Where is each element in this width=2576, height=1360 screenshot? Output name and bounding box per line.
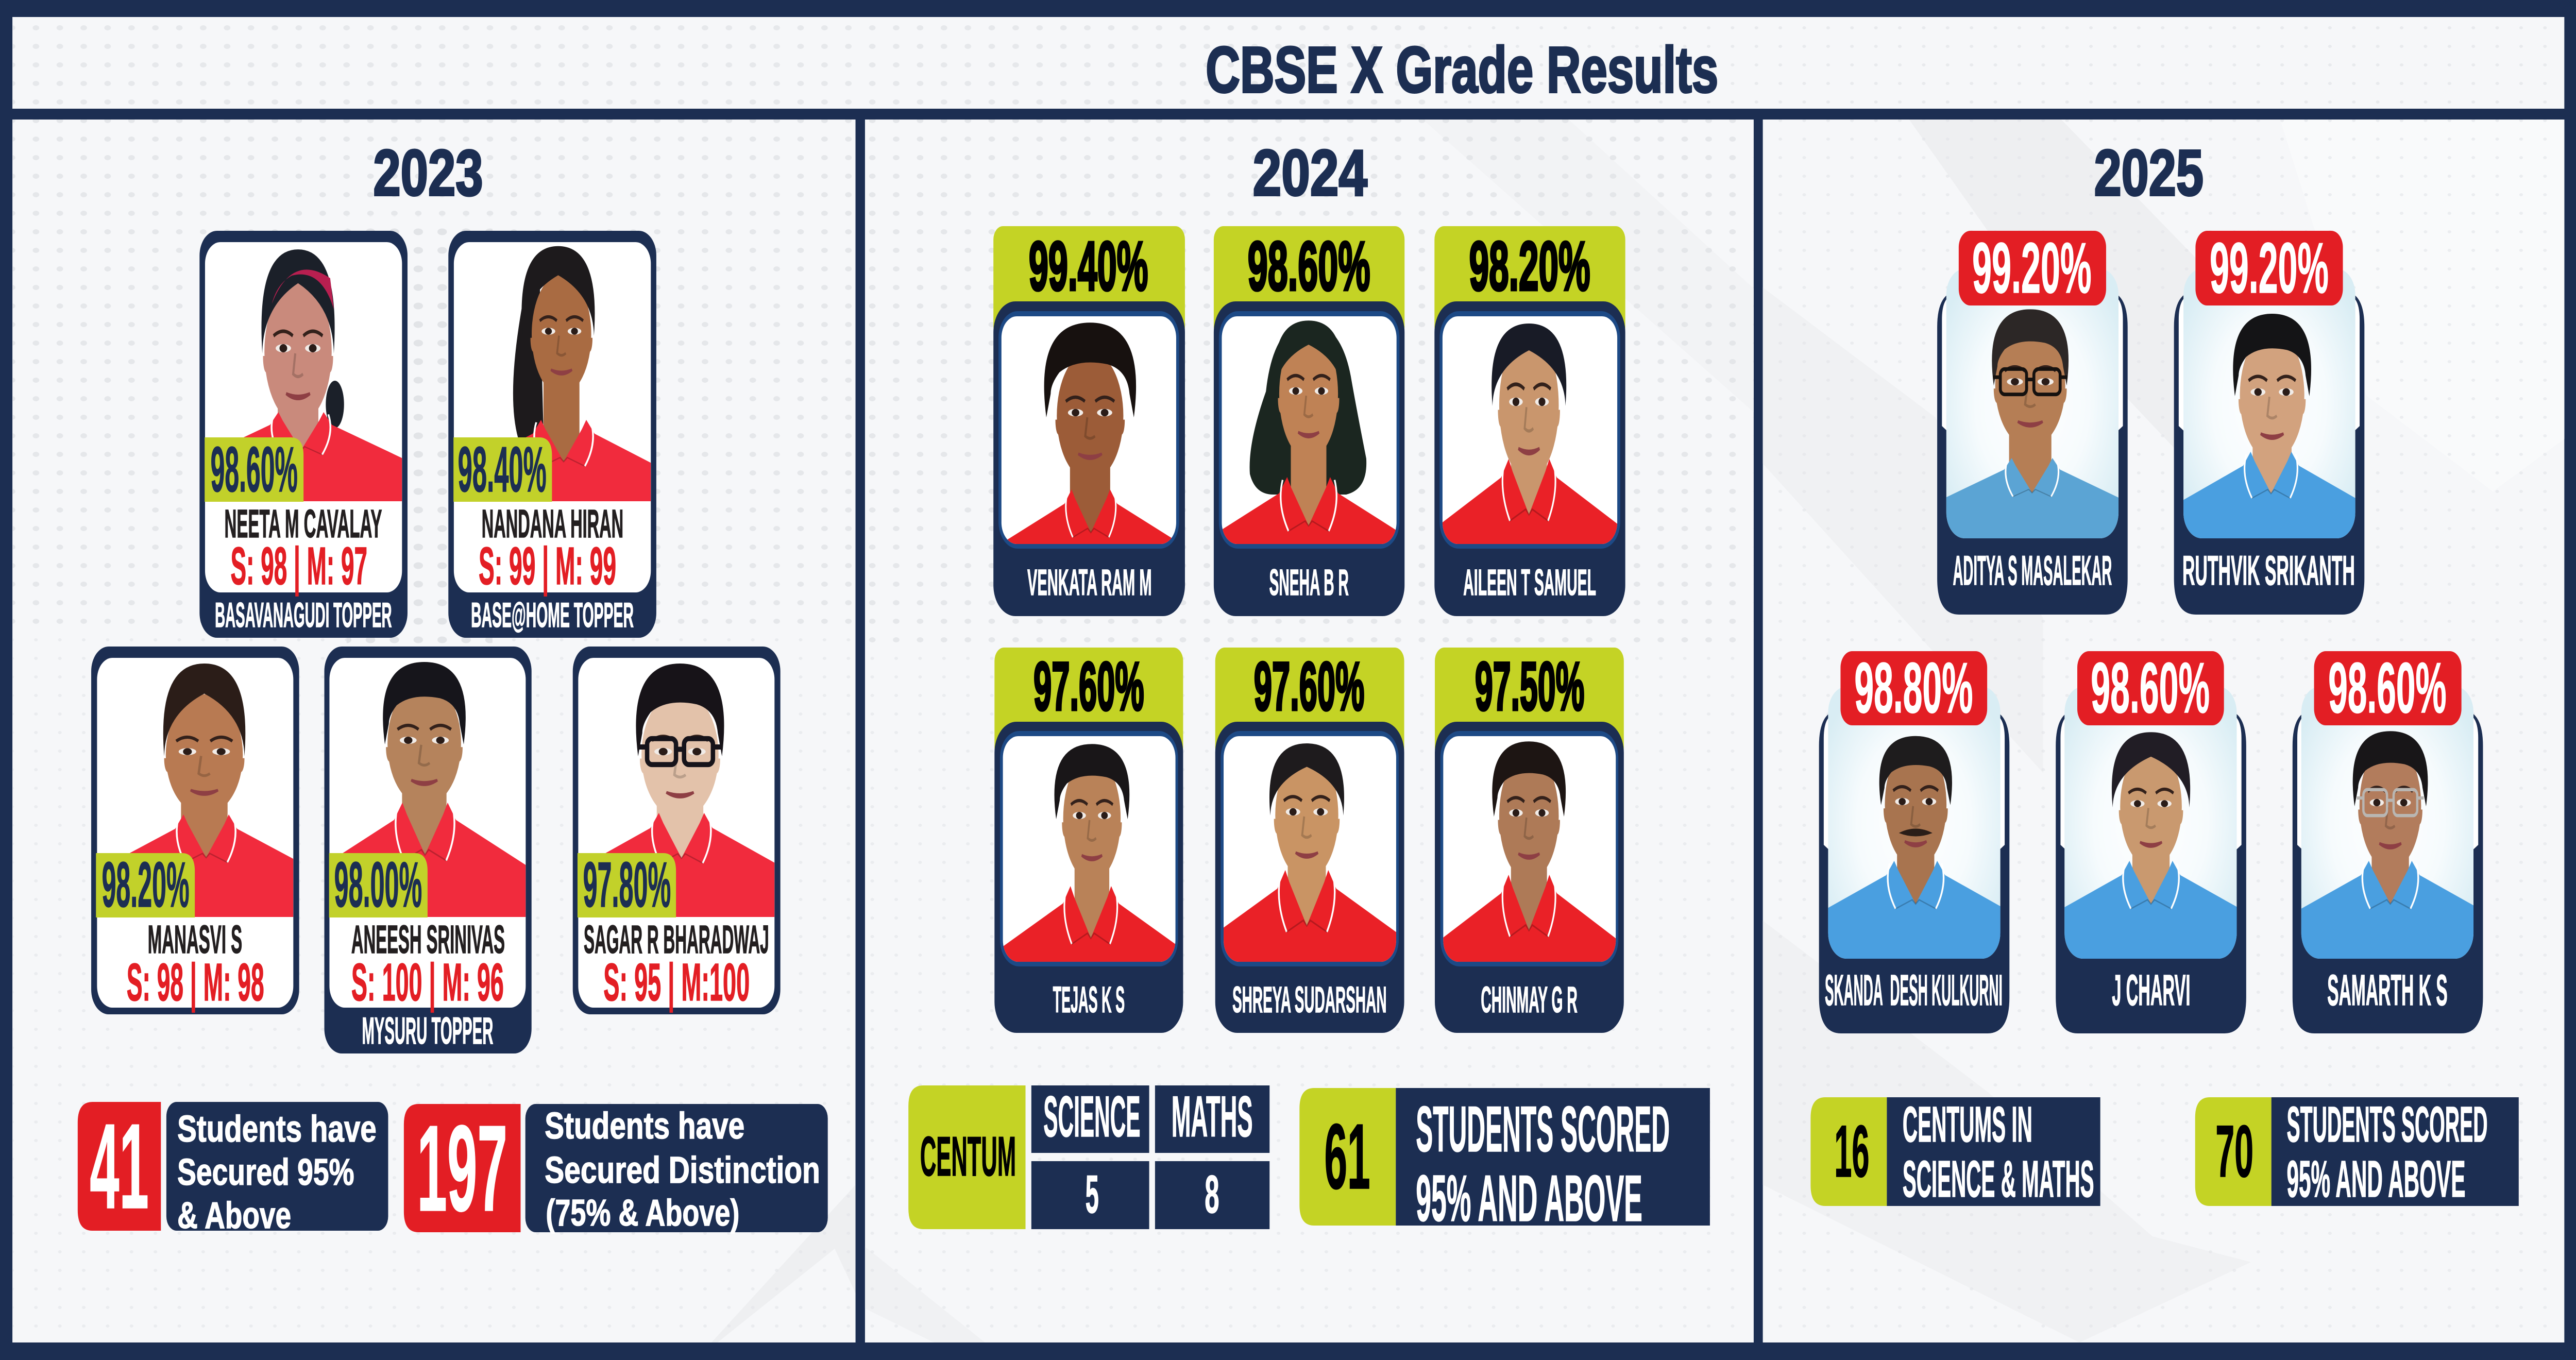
photo: Tejas xyxy=(986,744,1196,1052)
percentage badge: 98.80% xyxy=(1854,648,1973,728)
name: MANASVI S xyxy=(148,918,242,962)
percentage: 98.20% xyxy=(1469,227,1590,305)
percentage badge: 98.60% xyxy=(211,434,298,505)
percentage badge: 98.40% xyxy=(458,434,547,505)
name: SNEHA B R xyxy=(1269,563,1349,603)
stat: centum table xyxy=(908,1084,1269,1229)
percentage badge: 97.80% xyxy=(583,849,671,921)
card: Manasvi S xyxy=(91,647,299,1014)
heading: 2024: 2024 xyxy=(1253,137,1367,210)
stat: 197 students distinction: Students have xyxy=(545,1106,744,1147)
stat: centum table: SCIENCE xyxy=(1043,1084,1141,1149)
card: Aileen T Samuel xyxy=(1424,226,1634,636)
name: RUTHVIK SRIKANTH xyxy=(2182,547,2355,593)
card: Skanda Desh Kulkurni xyxy=(1805,648,2027,1033)
percentage badge xyxy=(205,434,303,505)
card: Nandana Hiran xyxy=(448,231,656,638)
stat: centum table: 5 xyxy=(1086,1165,1099,1225)
name: TEJAS K S xyxy=(1053,980,1125,1021)
photo: Aileen xyxy=(1424,324,1634,636)
stat: 61 students 95% and above xyxy=(1299,1088,1710,1235)
heading: 2023: 2023 xyxy=(373,137,483,210)
name: SAMARTH K S xyxy=(2327,966,2448,1014)
percentage badge xyxy=(453,434,552,505)
stat: 61 students 95% and above: 95% AND ABOVE xyxy=(1416,1162,1642,1235)
photo: Chinmay xyxy=(1424,741,1634,1052)
percentage: 97.50% xyxy=(1475,649,1584,725)
card: Aditya S Masalekar: ADITYA S MASALEKAR xyxy=(1953,547,2112,593)
percentage badge: 98.60% xyxy=(2328,648,2447,728)
stat: 61 students 95% and above: 61 xyxy=(1324,1105,1370,1209)
stat: centum table: 8 xyxy=(1205,1165,1219,1225)
percentage badge xyxy=(329,849,428,921)
card: Neeta M Cavalay xyxy=(199,231,408,638)
stat: 197 students distinction: 197 xyxy=(417,1099,507,1237)
name: NANDANA HIRAN xyxy=(482,502,623,546)
photo: J Charvi xyxy=(2040,732,2262,998)
name: SAGAR R BHARADWAJ xyxy=(584,918,769,962)
percentage badge: 98.60% xyxy=(2091,648,2210,728)
scores: S: 100 | M: 96 xyxy=(351,953,504,1012)
card: Shreya Sudarshan xyxy=(1196,648,1418,1047)
card: Samarth K S xyxy=(2279,648,2501,1033)
percentage badge xyxy=(96,849,195,921)
stat: 41 students 95% and above: & Above xyxy=(177,1196,291,1236)
card: Ruthvik Srikanth xyxy=(2166,228,2376,615)
card: Sneha B R xyxy=(1198,226,1419,632)
stat: 41 students 95% and above: Secured 95% xyxy=(177,1152,354,1193)
name: ANEESH SRINIVAS xyxy=(351,918,505,962)
photo: Venkata xyxy=(992,322,1190,627)
stat: 197 students distinction: (75% & Above) xyxy=(546,1193,739,1234)
panel: 2023 xyxy=(78,137,828,1237)
percentage: 97.60% xyxy=(1254,649,1364,725)
stat: 16 centums xyxy=(1810,1096,2100,1208)
photo: Manasvi xyxy=(130,664,294,917)
percentage badge xyxy=(578,849,676,921)
card: Aneesh Srinivas xyxy=(325,647,532,1053)
photo: Neeta xyxy=(184,249,418,575)
stat: 41 students 95% and above: 41 xyxy=(90,1099,149,1234)
name: SHREYA SUDARSHAN xyxy=(1232,980,1387,1021)
photo: Ruthvik xyxy=(2166,314,2376,601)
stat: 70 students 95% and above: 70 xyxy=(2215,1111,2253,1193)
percentage: 98.60% xyxy=(1248,227,1370,305)
photo: Samarth xyxy=(2279,731,2501,1007)
scores: S: 98 | M: 97 xyxy=(231,536,367,596)
heading: 2025: 2025 xyxy=(2094,137,2204,210)
name: AILEEN T SAMUEL xyxy=(1463,563,1596,603)
percentage badge: 98.20% xyxy=(102,849,190,921)
card: Skanda Desh Kulkurni: SKANDA DESH KULKURNI xyxy=(1825,966,2003,1014)
panel: 2024 xyxy=(908,137,1710,1235)
percentage badge: 99.20% xyxy=(2210,228,2329,308)
stat: 41 students 95% and above xyxy=(78,1099,388,1236)
scores: S: 99 | M: 99 xyxy=(479,536,616,596)
photo: Shreya xyxy=(1196,743,1418,1047)
percentage badge: 99.20% xyxy=(1972,228,2092,308)
panel: 2025 xyxy=(1805,137,2519,1208)
title: CBSE X Grade Results xyxy=(1206,34,1718,107)
name: NEETA M CAVALAY xyxy=(224,502,382,546)
topper tag: BASAVANAGUDI TOPPER xyxy=(215,596,392,635)
percentage: 97.60% xyxy=(1033,649,1144,725)
card: J Charvi xyxy=(2040,648,2262,1033)
stat: 61 students 95% and above: STUDENTS SCORED xyxy=(1416,1093,1670,1165)
photo: Aditya xyxy=(1927,309,2137,581)
card: Chinmay G R xyxy=(1424,648,1634,1052)
photo: Skanda xyxy=(1805,736,2027,1001)
scores: S: 95 | M:100 xyxy=(603,953,750,1012)
stat: 16 centums: 16 xyxy=(1834,1111,1869,1193)
name: CHINMAY G R xyxy=(1481,980,1578,1021)
topper tag: MYSURU TOPPER xyxy=(362,1010,493,1052)
photo: Sneha xyxy=(1198,320,1419,632)
photo: Aneesh xyxy=(343,662,526,917)
stat: 16 centums: CENTUMS IN xyxy=(1903,1096,2032,1152)
name: J CHARVI xyxy=(2112,966,2191,1014)
percentage: 99.40% xyxy=(1029,227,1148,305)
stat: 197 students distinction xyxy=(404,1099,828,1237)
stat: 70 students 95% and above xyxy=(2195,1096,2519,1208)
topper tag: BASE@HOME TOPPER xyxy=(471,596,634,635)
card: Venkata Ram M xyxy=(992,226,1190,627)
stat: 41 students 95% and above: Students have xyxy=(177,1109,377,1150)
stat: 16 centums: SCIENCE & MATHS xyxy=(1903,1151,2094,1208)
card: Sagar R Bharadwaj xyxy=(573,647,781,1014)
stat: centum table: MATHS xyxy=(1172,1084,1253,1149)
card: Tejas K S xyxy=(986,648,1196,1052)
name: VENKATA RAM M xyxy=(1027,563,1152,603)
photo: Sagar xyxy=(565,664,798,957)
stat: 197 students distinction: Secured Distinction xyxy=(545,1150,820,1191)
stat: centum table: CENTUM xyxy=(920,1126,1016,1188)
percentage badge: 98.00% xyxy=(334,849,422,921)
scores: S: 98 | M: 98 xyxy=(127,953,264,1012)
photo: Nandana xyxy=(447,246,681,553)
card: Aditya S Masalekar xyxy=(1927,228,2137,615)
